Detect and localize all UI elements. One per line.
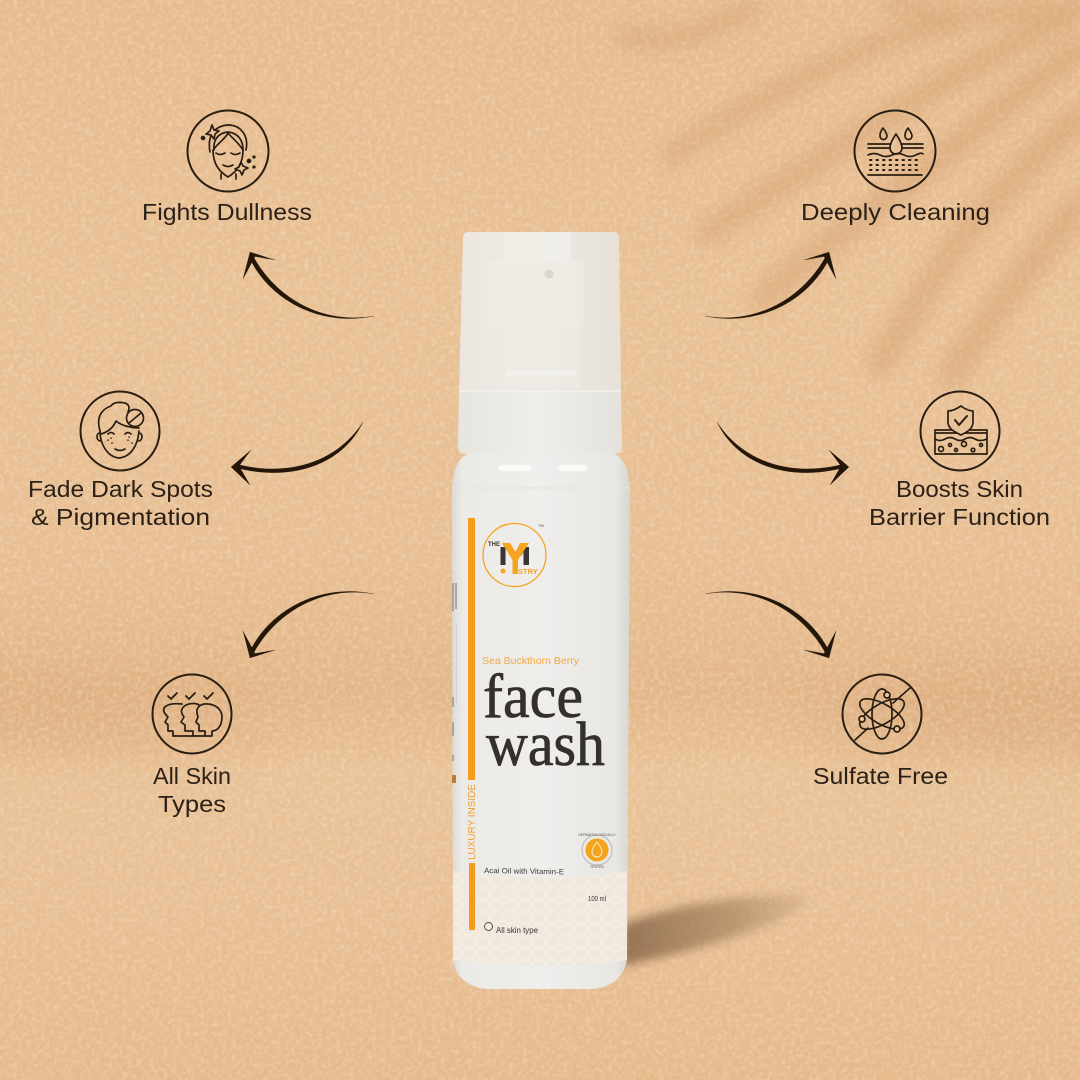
arrow: to All Skin Types	[243, 591, 374, 658]
pump head inside cap	[459, 232, 621, 392]
product name: face	[483, 663, 583, 731]
dermatologically tested badge: TESTED	[590, 865, 604, 869]
product subtitle: Sea Buckthorn Berry	[482, 655, 580, 667]
label: Fade Dark Spots & Pigmentation	[28, 476, 213, 530]
volume: 100 ml	[588, 894, 606, 903]
vertical text: LUXURY INSIDE	[466, 784, 478, 860]
brand logo: STRY	[518, 567, 538, 576]
product name	[483, 663, 605, 779]
label: Boosts Skin Barrier Function	[869, 476, 1050, 530]
all skin type mark: All skin type	[496, 926, 538, 935]
bottle body	[452, 452, 630, 989]
label: Boosts Skin Barrier Function: Barrier Function	[869, 504, 1050, 530]
arrow: to Fights Dullness	[243, 252, 374, 319]
icon: glowing face	[188, 110, 268, 192]
body shoulder line	[452, 487, 630, 489]
brand logo	[483, 523, 546, 586]
ingredient text: Acai Oil with Vitamin-E	[484, 866, 564, 876]
label: Deeply Cleaning: Deeply Cleaning	[801, 199, 990, 225]
orange stripe	[468, 518, 475, 780]
all skin type mark	[484, 922, 538, 935]
icon: dark spots face	[80, 392, 160, 470]
transparent cap	[459, 232, 621, 392]
arrow: to Sulfate Free	[705, 591, 836, 658]
brand logo: THE	[488, 542, 500, 548]
palm leaf shadow	[625, 0, 1080, 373]
arrow: to Boosts Skin Barrier	[717, 422, 849, 485]
dermatologically tested badge: DERMATOLOGICALLY	[578, 833, 616, 837]
arrow: to Deeply Cleaning	[705, 252, 836, 319]
arrow: to Fade Dark Spots	[231, 422, 363, 485]
label: All Skin Types	[153, 763, 231, 817]
brand logo: TM	[538, 523, 544, 528]
label: Fade Dark Spots & Pigmentation: & Pigmentation	[31, 504, 210, 530]
icon: deep cleaning water drops	[854, 110, 936, 192]
side label fine print	[452, 583, 457, 783]
bottle shadow	[622, 896, 812, 966]
neck highlights	[498, 465, 532, 471]
label: Fights Dullness: Fights Dullness	[142, 199, 312, 225]
pump collar	[458, 392, 622, 454]
label: Boosts Skin Barrier Function: Boosts Skin	[896, 476, 1023, 502]
label: All Skin Types: All Skin	[153, 763, 231, 789]
label: All Skin Types: Types	[158, 791, 226, 817]
icon: sulfate free atom	[842, 674, 922, 754]
label: Fade Dark Spots & Pigmentation: Fade Dark Spots	[28, 476, 213, 502]
dermatologically tested badge	[578, 833, 616, 869]
icon: all skin types heads	[152, 674, 232, 754]
textured label base	[453, 871, 627, 966]
label: Sulfate Free: Sulfate Free	[813, 763, 948, 789]
icon: skin barrier shield	[920, 392, 1000, 470]
product bottle	[452, 232, 630, 989]
product name: wash	[486, 711, 605, 779]
